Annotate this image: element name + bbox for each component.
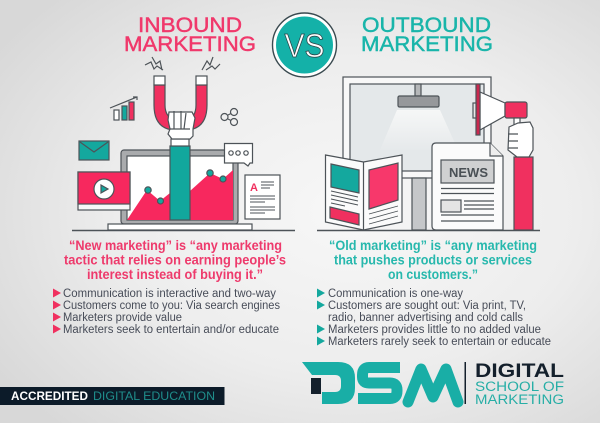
quote: inbound definition: tactic that relies on earning people’s: [64, 252, 286, 268]
quote: inbound definition: [64, 237, 286, 282]
quote: outbound definition: on customers.”: [388, 266, 478, 282]
list: inbound traits: Marketers provide value: [63, 312, 182, 324]
quote: outbound definition: [329, 237, 537, 282]
illustration: inbound laptop and magnet: [72, 57, 295, 230]
icon: document: A: [250, 182, 258, 194]
list: outbound traits: radio, banner advertising and cold calls: [328, 312, 523, 324]
logo: DSM: SCHOOL OF: [475, 379, 564, 394]
vs badge: VS: [284, 27, 324, 64]
area chart: [127, 170, 233, 220]
list: inbound traits: [53, 288, 280, 336]
list: inbound traits: Customers come to you: Via search engines: [63, 300, 280, 312]
title: outbound marketing: OUTBOUND: [362, 14, 491, 37]
icon: envelope: [79, 141, 109, 160]
list: inbound traits: Communication is interactive and two-way: [63, 288, 276, 300]
list: outbound traits: Customers are sought out: Via print, TV,: [328, 300, 526, 312]
list: outbound traits: Marketers provides little to no added value: [328, 324, 541, 336]
banner: accredited digital education: [0, 387, 224, 405]
title: inbound marketing: [124, 14, 256, 56]
quote: inbound definition: interest instead of buying it.”: [87, 266, 263, 282]
title: inbound marketing: MARKETING: [124, 33, 256, 56]
list: outbound traits: Marketers rarely seek to entertain or educate: [328, 336, 551, 348]
icon: growth chart: [110, 97, 137, 120]
megaphone: [473, 84, 527, 135]
fist: [168, 111, 195, 139]
banner: accredited digital education: DIGITAL EDUCATION: [93, 389, 215, 403]
title: inbound marketing: INBOUND: [138, 14, 242, 37]
logo: DSM: [302, 360, 564, 407]
ground line: [72, 230, 295, 232]
list: outbound traits: [317, 288, 551, 348]
newspaper: [432, 143, 503, 230]
list: outbound traits: Communication is one-way: [328, 288, 463, 300]
icon: share: [221, 108, 238, 126]
icon: video player: [78, 172, 130, 210]
sparks: [145, 57, 220, 70]
logo: DSM: MARKETING: [475, 392, 564, 407]
laptop: [108, 150, 252, 230]
logo: DSM: DIGITAL: [475, 360, 564, 382]
hand and arm: [508, 122, 533, 230]
arm: [170, 139, 190, 220]
title: outbound marketing: [361, 14, 493, 56]
billboard: [343, 77, 491, 230]
vs badge: [272, 13, 336, 77]
brochure: [326, 155, 402, 230]
title: outbound marketing: MARKETING: [361, 33, 493, 56]
quote: inbound definition: “New marketing” is “any marketing: [69, 237, 282, 253]
icon: document: [245, 175, 280, 219]
quote: outbound definition: “Old marketing” is “any marketing: [329, 237, 537, 253]
magnet: [154, 76, 207, 130]
icon: chat bubble: [224, 144, 252, 166]
projector: [380, 84, 458, 150]
banner: accredited digital education: ACCREDITED: [11, 389, 88, 403]
ground line: [317, 230, 540, 232]
illustration: outbound media: [317, 77, 540, 230]
quote: outbound definition: that pushes products or services: [334, 252, 532, 268]
newspaper: NEWS: [449, 166, 488, 180]
list: inbound traits: Marketers seek to entertain and/or educate: [63, 324, 279, 336]
